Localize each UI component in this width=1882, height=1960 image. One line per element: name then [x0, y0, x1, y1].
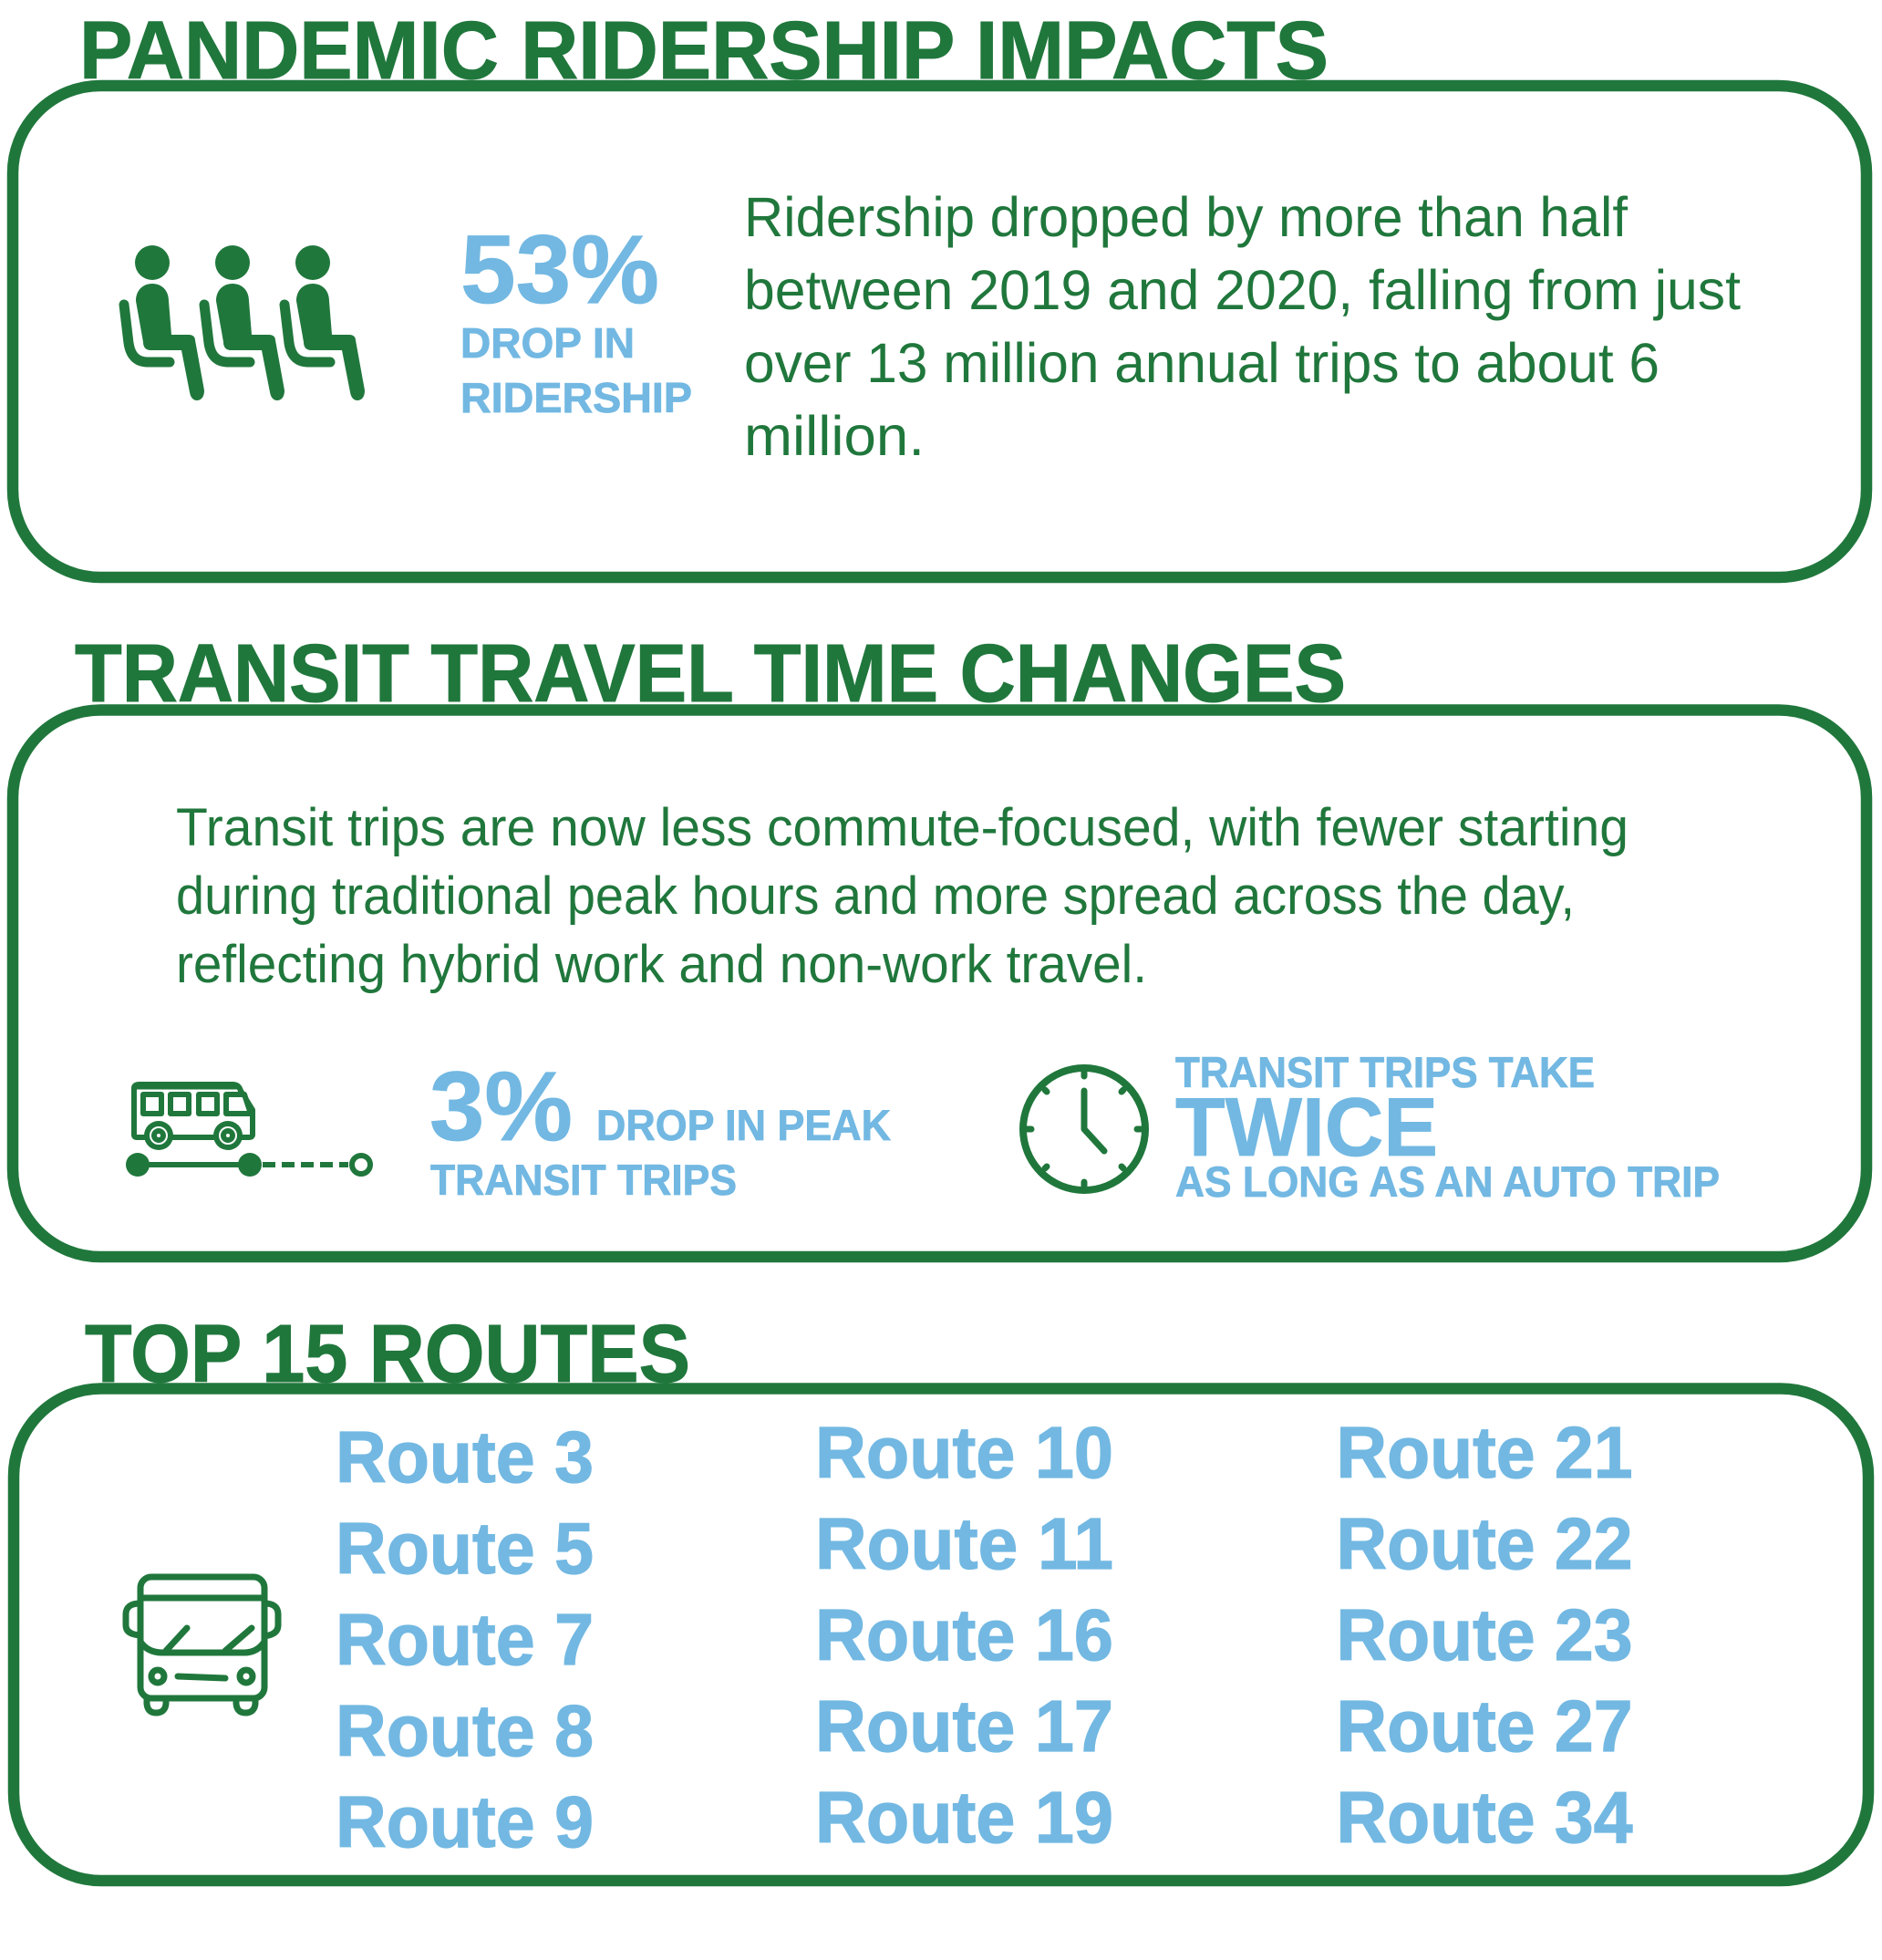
- stat: 53% drop in ridership: 53%: [460, 214, 659, 324]
- icon: front of bus: [126, 1577, 278, 1713]
- text block: travel description: reflecting hybrid work and non-work travel.: [176, 935, 1147, 994]
- stat: transit trips take twice as long: TWICE: [1175, 1082, 1438, 1174]
- panel: transit travel time changes: [13, 628, 1866, 1257]
- stat: 53% drop in ridership: [460, 214, 692, 421]
- stat: 53% drop in ridership: RIDERSHIP: [460, 374, 692, 421]
- stat: 3% drop in peak transit trips: [429, 1051, 891, 1204]
- stat: transit trips take twice as long: TRANSIT TRIPS TAKE: [1175, 1048, 1595, 1096]
- stat: transit trips take twice as long: [1175, 1048, 1720, 1206]
- route list: column 3: Route 23: [1337, 1594, 1632, 1675]
- route list: column 2: Route 16: [815, 1594, 1113, 1675]
- text block: ridership description: million.: [744, 405, 925, 467]
- text block: travel description: during traditional peak hours and more spread across the day,: [176, 866, 1575, 926]
- text block: ridership description: over 13 million annual trips to about 6: [744, 332, 1660, 394]
- route list: column 3: Route 27: [1337, 1685, 1632, 1767]
- icon: bus on route line: [126, 1084, 370, 1177]
- panel: pandemic ridership impacts: [13, 5, 1866, 577]
- stat: transit trips take twice as long: AS LONG AS AN AUTO TRIP: [1175, 1157, 1720, 1206]
- route list: column 1: Route 9: [336, 1781, 594, 1862]
- heading: top 15 routes: TOP 15 ROUTES: [85, 1309, 690, 1400]
- heading: pandemic ridership impacts: PANDEMIC RIDERSHIP IMPACTS: [79, 5, 1329, 97]
- route list: column 3: [1337, 1412, 1633, 1858]
- panel outline: [13, 86, 1866, 577]
- route list: column 2: Route 11: [815, 1503, 1113, 1584]
- route list: column 1: Route 8: [336, 1690, 594, 1771]
- route list: column 2: Route 17: [815, 1685, 1113, 1767]
- route list: column 2: Route 10: [815, 1412, 1113, 1493]
- route list: column 3: Route 21: [1337, 1412, 1632, 1493]
- text block: ridership description: Ridership dropped by more than half: [744, 186, 1629, 248]
- stat: 3% drop in peak transit trips: DROP IN PEAK: [596, 1101, 891, 1149]
- route list: column 2: [815, 1412, 1113, 1858]
- route list: column 1: Route 5: [336, 1508, 594, 1589]
- panel: top 15 routes: [14, 1309, 1868, 1881]
- stat: 3% drop in peak transit trips: 3%: [429, 1051, 573, 1161]
- route list: column 1: Route 3: [336, 1416, 594, 1498]
- text block: ridership description: between 2019 and 2020, falling from just: [744, 259, 1741, 321]
- panel outline: [14, 1388, 1868, 1881]
- stat: 3% drop in peak transit trips: TRANSIT TRIPS: [430, 1156, 737, 1204]
- route list: column 1: [336, 1416, 594, 1862]
- heading: transit travel time changes: TRANSIT TRAVEL TIME CHANGES: [75, 628, 1346, 720]
- route list: column 3: Route 22: [1337, 1503, 1632, 1584]
- text block: ridership description: [744, 186, 1741, 467]
- route list: column 1: Route 7: [336, 1599, 594, 1680]
- text block: travel description: Transit trips are now less commute-focused, with fewer starting: [176, 798, 1629, 857]
- route list: column 3: Route 34: [1337, 1777, 1633, 1858]
- stat: 53% drop in ridership: DROP IN: [460, 319, 635, 367]
- route list: column 2: Route 19: [815, 1777, 1113, 1858]
- panel outline: [13, 710, 1866, 1257]
- icon: three seated passengers: [124, 245, 365, 400]
- icon: clock: [1023, 1068, 1145, 1190]
- text block: travel description: [176, 798, 1629, 994]
